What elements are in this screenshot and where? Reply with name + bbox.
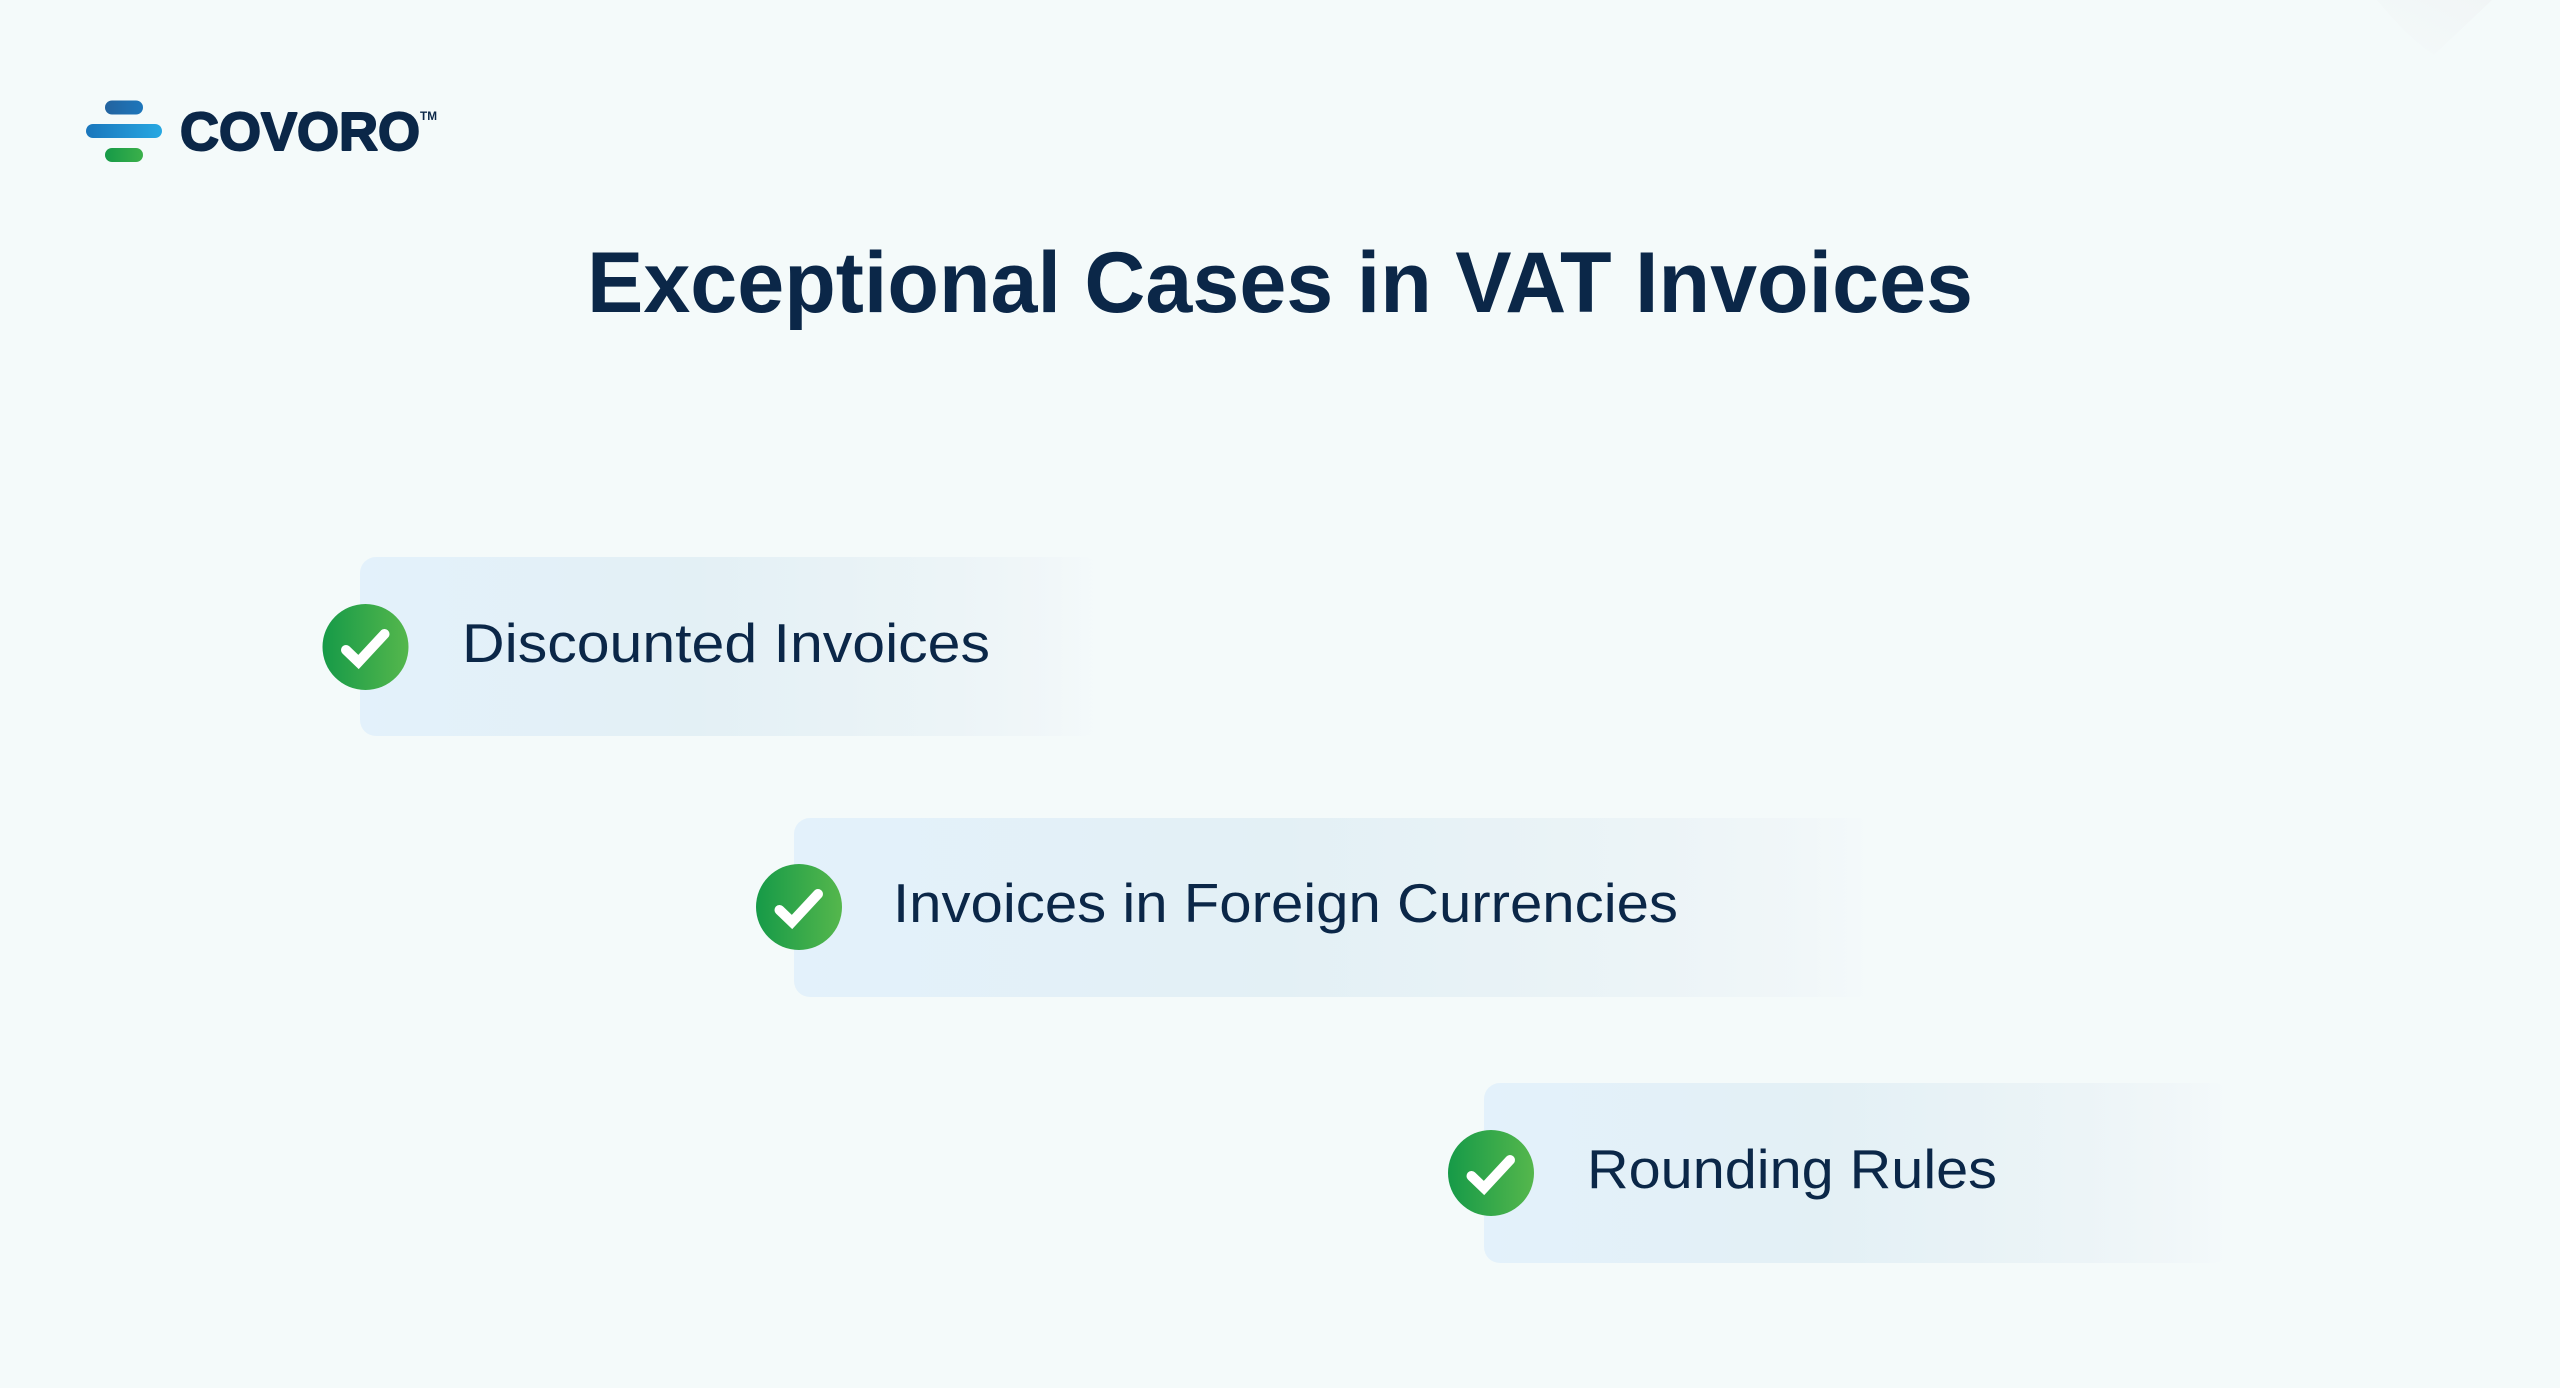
item: rounding rules bbox=[1448, 1083, 2230, 1263]
item: invoices in foreign currencies bbox=[756, 818, 1875, 997]
card background bbox=[1484, 1083, 2230, 1263]
trademark: TM bbox=[420, 109, 437, 123]
label: Rounding Rules bbox=[1587, 1138, 1997, 1200]
item: discounted invoices bbox=[322, 557, 1100, 736]
icon: check badge bbox=[756, 864, 842, 950]
decorative corner shape bbox=[2377, 0, 2492, 55]
card background bbox=[360, 557, 1100, 736]
icon: check badge bbox=[322, 604, 408, 690]
label: Invoices in Foreign Currencies bbox=[893, 872, 1678, 934]
card background bbox=[794, 818, 1875, 997]
icon: check badge bbox=[1448, 1130, 1534, 1216]
title: Exceptional Cases in VAT Invoices bbox=[587, 235, 1973, 331]
label: Discounted Invoices bbox=[462, 612, 990, 674]
logo mark bbox=[86, 100, 162, 162]
logo wordmark: COVORO bbox=[180, 102, 420, 162]
logo bbox=[86, 100, 437, 162]
